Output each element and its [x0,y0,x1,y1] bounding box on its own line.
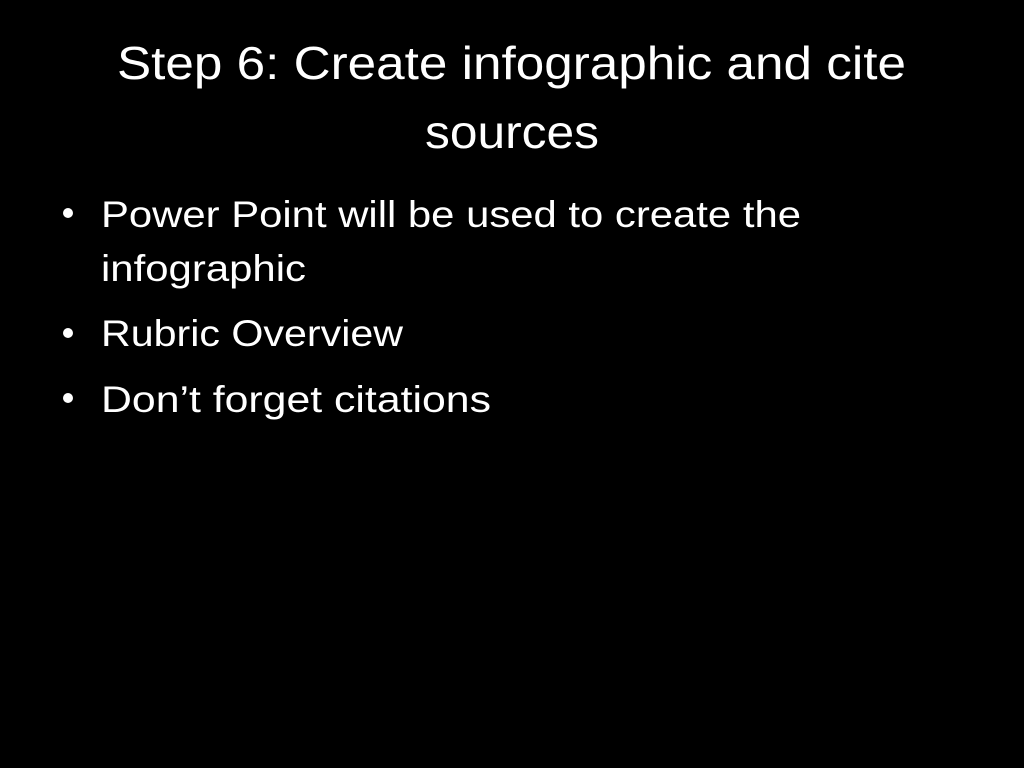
bullet: Power Point: infographic [101,248,306,289]
title: sources [425,106,599,158]
bullet list [63,194,801,420]
bullet: Power Point [63,194,801,289]
bullet: Power Point: Power Point will be used to create the [101,194,801,235]
bullet: Rubric Overview: Rubric Overview [101,313,403,354]
title [117,37,906,158]
title: Step 6: Create infographic and cite [117,37,906,89]
bullet: citations: Don’t forget citations [101,379,491,420]
